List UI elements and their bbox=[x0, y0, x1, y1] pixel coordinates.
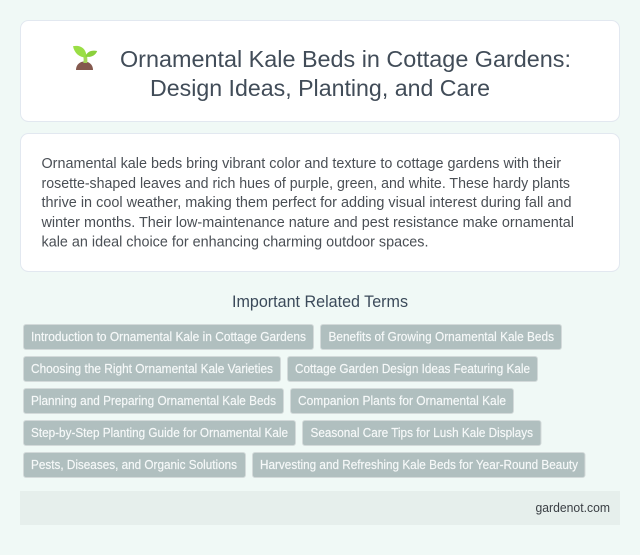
tag: Pests, Diseases, and Organic Solutions bbox=[31, 458, 237, 472]
tag: Benefits of Growing Ornamental Kale Beds bbox=[328, 330, 554, 344]
tag: Companion Plants for Ornamental Kale bbox=[298, 394, 506, 408]
text block: intro: rosette-shaped leaves and rich hues of purple, green, and white. These hardy plants bbox=[42, 176, 570, 192]
panel: intro paragraph bbox=[20, 134, 620, 272]
tag: Harvesting and Refreshing Kale Beds for Year-Round Beauty bbox=[260, 458, 579, 472]
title: Ornamental Kale Beds in Cottage Gardens: bbox=[120, 46, 571, 72]
footer bar bbox=[20, 491, 620, 525]
title bbox=[120, 46, 571, 101]
tag bbox=[252, 452, 585, 478]
tag bbox=[290, 388, 514, 414]
tag bbox=[24, 356, 280, 382]
tag bbox=[24, 420, 296, 446]
tag bbox=[24, 388, 284, 414]
text block: intro: winter months. Their low-maintenance nature and pest resistance make ornamental bbox=[41, 215, 574, 231]
heading: related terms: Important Related Terms bbox=[232, 293, 408, 311]
tag: Introduction to Ornamental Kale in Cottage Gardens bbox=[31, 330, 306, 344]
tag bbox=[302, 420, 541, 446]
tag bbox=[24, 324, 314, 350]
tag list bbox=[24, 324, 585, 478]
tag: Planning and Preparing Ornamental Kale Beds bbox=[31, 394, 276, 408]
text block: intro: Ornamental kale beds bring vibrant color and texture to cottage gardens with their bbox=[42, 156, 561, 172]
tag: Choosing the Right Ornamental Kale Varieties bbox=[31, 362, 273, 376]
tag bbox=[320, 324, 562, 350]
text block: intro: kale an ideal choice for enhancing charming outdoor spaces. bbox=[42, 234, 428, 250]
text block: intro: thrive in cool weather, making them perfect for adding visual interest during fall and bbox=[42, 195, 572, 211]
icon: sprout bbox=[73, 46, 97, 70]
tag bbox=[288, 356, 538, 382]
text block: intro bbox=[41, 156, 574, 250]
title: Design Ideas, Planting, and Care bbox=[150, 75, 490, 101]
footer credit: gardenot.com bbox=[536, 500, 610, 515]
tag: Cottage Garden Design Ideas Featuring Kale bbox=[295, 362, 530, 376]
panel: header bbox=[20, 20, 620, 122]
tag bbox=[24, 452, 246, 478]
tag: Step-by-Step Planting Guide for Ornamental Kale bbox=[31, 426, 288, 440]
tag: Seasonal Care Tips for Lush Kale Displays bbox=[310, 426, 533, 440]
